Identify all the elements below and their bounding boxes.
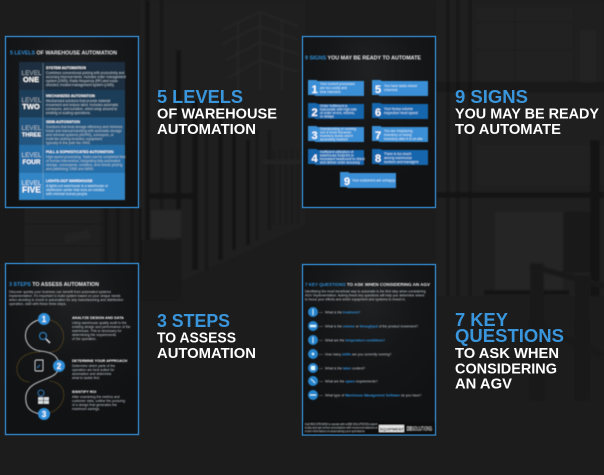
level three row: travel and manual handling with automatic storage <box>46 129 122 133</box>
panel title: 7 key questions: 7 KEY QUESTIONS TO ASK WHEN CONSIDERING AN AGV <box>305 282 430 287</box>
question 6: What are the space requirements? <box>325 380 378 384</box>
level one row: SYSTEM AUTOMATION <box>46 66 86 70</box>
level three row: multi-tier picking modules; equipment <box>46 137 102 141</box>
step 3 text: customer data, outline the pursuing <box>72 399 125 403</box>
sign 4: warehouse footprint or <box>320 154 355 158</box>
heading: 5 levels of warehouse automation: OF WAREHOUSE <box>157 106 277 122</box>
footer contact and logos: Call 800.378.0066 to speak with a DB SOLUTIONS expert <box>305 422 378 426</box>
level one row: ONE <box>23 75 39 84</box>
sign 1: Your current processes <box>320 82 355 86</box>
panel: 9 signs you may be ready to automate <box>302 36 436 208</box>
heading: 9 signs you may be ready to automate <box>455 86 599 138</box>
panel: 5 levels of warehouse automation <box>6 36 138 208</box>
sign 3: out of stock because <box>320 130 351 134</box>
heading: 7 key questions to ask when considering an AGV: QUESTIONS <box>455 325 564 346</box>
level one row: LEVEL <box>22 70 42 77</box>
footer contact and logos: today and get a free consultation with recommendations or <box>305 426 378 430</box>
sign 8: among warehouse <box>384 156 412 160</box>
level two row: LEVEL <box>22 97 42 104</box>
level five row: LIGHTS-OUT WAREHOUSE <box>46 179 93 183</box>
intro text: Identifying the most beneficial way to automate is the first step when considering <box>305 290 426 294</box>
question 4 <box>308 349 391 359</box>
step circle 2: 2 <box>57 362 62 371</box>
footer contact and logos: DBSOLUTIONS <box>407 426 432 432</box>
level three row <box>19 118 125 145</box>
sign 6: inspection must speed <box>384 111 418 115</box>
sign 1: time intensive <box>320 90 341 94</box>
sign 2: inaccurate with high rate <box>320 108 357 112</box>
sign 8: There is too much <box>384 152 411 156</box>
sign 6: Your heavy-volume <box>384 107 413 111</box>
heading: 3 steps to assess automation: TO ASSESS <box>157 330 236 346</box>
sign 5: channels <box>384 88 398 92</box>
sign 7: inventory or losing <box>384 133 412 137</box>
step 2 text: automation and determine <box>72 372 112 376</box>
heading: 3 steps to assess automation: AUTOMATION <box>157 346 256 362</box>
level five row: A lights-out warehouse is a warehouse or <box>46 184 109 188</box>
sign 8: 8 <box>375 153 381 165</box>
icon: checklist <box>38 390 49 404</box>
level three row: LEVEL <box>22 125 42 132</box>
sign 4: Inefficient utilization of <box>320 150 353 154</box>
intro text: operation, start with these three steps. <box>9 302 67 306</box>
heading: 3 steps to assess automation <box>157 310 256 362</box>
intro text: implementation. It's important to build system based on your unique needs <box>9 294 121 298</box>
sign 1: 1 <box>312 84 318 96</box>
level four row: storage, conveyance, sortation, and robotic picking <box>46 163 122 167</box>
sign 6 <box>372 103 428 119</box>
sign 9 <box>340 172 396 188</box>
sign 4: increased headcount to check <box>320 157 365 161</box>
sign 8: workers and managers <box>384 160 419 164</box>
level five row: with minimal human people. <box>46 192 88 196</box>
level four row: High-speed processing. Tasks can be completed free <box>46 155 126 159</box>
level five row: FIVE <box>22 184 41 194</box>
level four row: of human intervention, integrating fully automated <box>46 159 120 163</box>
sign 2: Order fulfillment is <box>320 104 348 108</box>
heading: 9 signs you may be ready to automate: YOU MAY BE READY <box>455 106 599 122</box>
heading: 5 levels of warehouse automation: 5 LEVELS <box>157 86 243 107</box>
sign 5: You have tasks mixed <box>384 84 417 88</box>
sign 7: inventory after it is on-site <box>384 137 423 141</box>
footer contact and logos <box>304 422 434 434</box>
heading: 7 key questions to ask when considering an AGV: TO ASK WHEN <box>455 346 559 362</box>
level two row: movement and reduce labor. Includes automatic <box>46 103 118 107</box>
question 3: What are the temperature conditions? <box>325 338 385 342</box>
level one row: directed; modest management system (LMS). <box>46 83 115 87</box>
sign 3: 3 <box>312 130 318 142</box>
step 3 text: After examining the metrics and <box>72 395 120 399</box>
panel: 7 key questions to ask when considering an AGV <box>302 264 436 435</box>
heading: 5 levels of warehouse automation: AUTOMATION <box>157 122 256 138</box>
sign 8 <box>372 149 428 165</box>
intro text <box>9 290 123 306</box>
heading: 7 key questions to ask when considering an AGV: CONSIDERING <box>455 362 557 378</box>
sign 4 <box>308 149 365 165</box>
step 3 text: IDENTIFY ROI <box>72 390 96 394</box>
step 1 text: determining the requirements <box>72 333 116 337</box>
level one row: accuracy improvements. Includes order management <box>46 75 126 79</box>
level four row: FOUR <box>22 159 41 166</box>
sign 2: or delays <box>320 114 334 118</box>
icon: magnifier <box>40 332 50 343</box>
step 2 text: DETERMINE YOUR APPROACH <box>72 359 128 363</box>
sign 5 <box>372 80 428 96</box>
step 2 text: Determine which parts of the <box>72 364 115 368</box>
heading: 9 signs you may be ready to automate: TO AUTOMATE <box>455 122 561 138</box>
step 2 text: operation are best suited for <box>72 368 115 372</box>
level four row <box>19 145 126 173</box>
sign 4: and deliver order accuracy <box>320 160 360 164</box>
step 1 text <box>72 316 131 341</box>
level one row: Combines conventional picking with productivity and <box>46 71 125 75</box>
sign 7: You are misplacing <box>384 129 413 133</box>
question 7 <box>308 390 421 400</box>
step circle 3: 3 <box>42 410 47 419</box>
level two row: TWO <box>22 102 40 111</box>
sign 4: 4 <box>312 153 318 165</box>
step 1 text: Using warehouse quality audit to the <box>72 321 127 325</box>
level three row: THREE <box>22 132 41 138</box>
intro text: to focus your efforts and which equipment and systems to invest in. <box>305 298 406 302</box>
step flow diagram <box>17 313 65 420</box>
level one row <box>19 62 126 90</box>
step 3 text: of a design that generates the <box>72 403 117 407</box>
sign 2: of order errors, returns, <box>320 111 355 115</box>
level three row: typically in this path the OMS. <box>46 141 91 145</box>
step 1 text: of the operation. <box>72 337 97 341</box>
level four row: and palletizing; OMS and WMS. <box>46 167 94 171</box>
level five row: distribution center that runs on robotics <box>46 188 105 192</box>
level four row: LEVEL <box>22 152 42 159</box>
heading: 3 steps to assess automation: 3 STEPS <box>157 310 230 331</box>
intro text: AGV implementation. Asking these key questions will help you determine where <box>305 294 425 298</box>
level two row: Mechanized solutions that provide material <box>46 99 111 103</box>
question 2: What is the volume or throughput of the product movement? <box>325 324 418 328</box>
question 4: How many shifts are you currently running? <box>325 352 391 356</box>
level five row: LEVEL <box>22 180 42 187</box>
level two row: existing or scaling operations. <box>46 111 91 115</box>
step 3 text: maximum savings. <box>72 407 100 411</box>
sign 2 <box>308 103 364 119</box>
question 5: What is the labor content? <box>325 366 365 370</box>
step circle 1: 1 <box>42 315 47 324</box>
sign 1 <box>308 80 364 96</box>
footer contact and logos: more information on automating your operations. <box>305 429 366 433</box>
footer contact and logos: EQUIPMENT <box>380 426 404 432</box>
sign 7: 7 <box>375 130 381 142</box>
level five row <box>19 173 125 200</box>
sign 1: are too costly and <box>320 86 347 90</box>
sign 6: 6 <box>375 107 381 119</box>
level four row: FULL & SOPHISTICATED AUTOMATION <box>46 150 114 154</box>
level two row <box>19 90 125 118</box>
question 6 <box>308 376 378 386</box>
sign 2: 2 <box>312 107 318 119</box>
sign 9: 9 <box>344 176 350 188</box>
intro text: when deciding to invest in automation for any manufacturing and distribution <box>9 298 123 302</box>
step 1 text: existing design and performance of the <box>72 325 131 329</box>
level three row: and retrieval systems (AS/RS), conveyors, or <box>46 133 115 137</box>
step 3 text <box>72 390 125 411</box>
question 1: What is the treatment? <box>325 310 360 314</box>
panel: 3 steps to assess automation <box>6 264 138 434</box>
heading: 7 key questions to ask when considering an AGV: AN AGV <box>455 376 512 392</box>
heading: 5 levels of warehouse automation <box>157 86 277 138</box>
question 5 <box>308 363 365 373</box>
heading: 7 key questions to ask when considering an AGV: 7 KEY <box>455 309 509 330</box>
intro text <box>305 290 426 302</box>
sign 3: Overstocking or running <box>320 127 356 131</box>
panel title: 3 steps: 3 STEPS TO ASSESS AUTOMATION <box>9 282 99 288</box>
sign 9: Your customers are unhappy <box>352 178 396 182</box>
heading: 9 signs you may be ready to automate: 9 SIGNS <box>455 86 528 107</box>
question 7: What type of Warehouse Management Software do you have? <box>325 394 421 398</box>
level two row: conveyors, and sortation, which wrap around to <box>46 107 117 111</box>
sign 3: accurately tracked <box>320 138 348 142</box>
level two row: MECHANIZED AUTOMATION <box>46 94 95 98</box>
panel title: 9 signs: 9 SIGNS YOU MAY BE READY TO AUTOMATE <box>305 56 421 62</box>
question 3 <box>308 335 385 345</box>
question 2 <box>308 321 418 331</box>
heading: 7 key questions to ask when considering an AGV <box>455 309 564 392</box>
step 2 text <box>72 359 128 380</box>
panel title: 5 levels: 5 LEVELS OF WAREHOUSE AUTOMATION <box>10 50 117 56</box>
intro text: Discover quickly your business can benefit from automated systems <box>9 290 111 294</box>
sign 5: 5 <box>375 84 381 96</box>
step 1 text: warehouse. This is necessary for <box>72 329 122 333</box>
question 1 <box>308 307 360 317</box>
sign 3 <box>308 126 364 142</box>
sign 3: inventory levels aren't <box>320 134 353 138</box>
icon: document <box>35 360 43 371</box>
level one row: system (OMS), Radio frequency (RF) and voice- <box>46 79 119 83</box>
level three row: SEMI-AUTOMATION <box>46 120 80 124</box>
step 2 text: what to tackle first. <box>72 376 100 380</box>
sign 7 <box>372 126 428 142</box>
level three row: Solutions that treat storage efficiency and minimize <box>46 125 123 129</box>
step 1 text: ANALYZE DESIGN AND DATA <box>72 316 124 320</box>
